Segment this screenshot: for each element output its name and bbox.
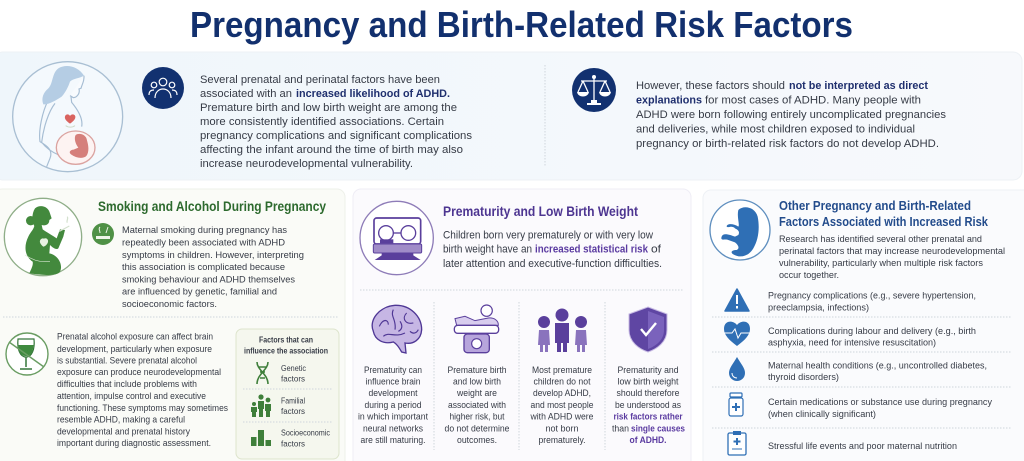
icon: bar chart — [251, 430, 271, 446]
text block: smoking: Maternal smoking during pregnancy has — [122, 225, 287, 236]
text block: smoking: repeatedly been associated with ADHD — [122, 238, 285, 248]
text block: most do not develop ADHD: develop ADHD, — [533, 388, 591, 399]
text block: associations — [200, 74, 473, 170]
text block: prematurity — [443, 230, 662, 270]
icon: people group — [142, 67, 184, 109]
labels: factors: Socioeconomic — [281, 428, 331, 438]
list: risk factors: Complications during labour and delivery (e.g., birth — [768, 326, 976, 337]
text block: risk factors not single causes — [612, 365, 685, 446]
list: risk factors: asphyxia, need for intensive resuscitation) — [768, 338, 936, 348]
labels: factors — [281, 363, 331, 448]
icon: warning triangle — [725, 289, 749, 311]
text block: associated with higher risk: Premature birth — [448, 365, 506, 376]
text block: not direct explanations: pregnancy or birth-related risk factors do not develop ADHD. — [636, 138, 939, 150]
icon: infant scale — [454, 305, 499, 353]
list: risk factors: (when clinically significant) — [768, 409, 876, 420]
text block: smoking: are influenced by genetic, familial and — [122, 286, 277, 298]
text block: most do not develop ADHD: children do not — [534, 376, 591, 388]
text block: not direct explanations: However, these factors should — [636, 80, 785, 92]
text block: brain development: development — [368, 388, 418, 399]
icon: heart pulse — [724, 322, 750, 346]
text block: associations: associated with an — [200, 88, 292, 100]
text block: risk factors not single causes: than — [612, 424, 629, 434]
text block: associated with higher risk: do not determine — [444, 424, 510, 434]
panel: introduction — [0, 52, 1022, 180]
text block: prematurity: increased statistical risk — [535, 244, 649, 256]
list: risk factors — [768, 290, 992, 452]
panel: prematurity and low birth weight — [353, 189, 691, 461]
icon: DNA — [257, 362, 268, 384]
title: Pregnancy and Birth-Related Risk Factors — [190, 4, 853, 45]
text block: most do not develop ADHD: prematurely. — [538, 435, 586, 446]
icon: shield with check — [629, 307, 667, 352]
text block: brain development: in which important — [358, 412, 428, 422]
text block: alcohol: is substantial. Severe prenatal alcohol — [57, 356, 197, 366]
heading: Prematurity and Low Birth Weight — [443, 204, 638, 219]
text block: alcohol: development, particularly when exposure — [57, 344, 212, 355]
text block: risk factors not single causes: should therefore — [616, 388, 680, 399]
text block: most do not develop ADHD — [530, 365, 594, 446]
text block: not direct explanations: explanations — [636, 94, 702, 106]
text block: brain development: influence brain — [366, 376, 420, 388]
panel: factors that can influence the association: influence the association — [244, 346, 328, 356]
text block: associations: Several prenatal and perinatal factors have been — [200, 74, 440, 86]
labels: factors: Genetic — [281, 363, 307, 373]
labels: factors: factors — [281, 438, 305, 448]
text block: associations: pregnancy complications and significant complications — [200, 130, 473, 142]
text block: smoking: symptoms in children. However, interpreting — [122, 250, 304, 261]
labels: factors: factors — [281, 374, 305, 384]
text block: associated with higher risk: outcomes. — [457, 435, 497, 446]
text block: risk factors not single causes: low birth weight — [618, 376, 679, 388]
icon: brain — [372, 305, 422, 353]
text block: smoking: this association is complicated because — [122, 262, 285, 273]
text block: prematurity: of — [651, 244, 662, 256]
text block: prematurity: later attention and executive-function difficulties. — [443, 258, 662, 270]
text block: alcohol: difficulties that include problems with — [57, 379, 197, 390]
text block: alcohol: resemble ADHD, making a careful — [57, 414, 185, 426]
icon: pregnant silhouette smoking — [4, 198, 82, 276]
text block: research — [779, 234, 1005, 281]
icon: pregnant mother in circle — [13, 62, 123, 172]
heading — [779, 198, 989, 229]
list: risk factors: Certain medications or substance use during pregnancy — [768, 397, 992, 408]
heading: Other Pregnancy and Birth-Related — [779, 198, 971, 213]
text block: associations: more consistently identified associations. Certain — [200, 116, 444, 128]
text block: associations: increased likelihood of ADHD. — [296, 88, 450, 100]
text block: most do not develop ADHD: not born — [546, 424, 578, 434]
icon: medicine bottle — [729, 393, 743, 416]
text block: alcohol: functioning. These symptoms may sometimes — [57, 403, 228, 414]
text block: risk factors not single causes: Prematurity and — [618, 365, 678, 376]
text block: smoking: smoking behaviour and ADHD themselves — [122, 274, 295, 286]
list: risk factors: thyroid disorders) — [768, 372, 839, 383]
text block: research: occur together. — [779, 270, 839, 281]
text block: most do not develop ADHD: Most premature — [532, 365, 592, 376]
text block: risk factors not single causes: single causes — [631, 424, 685, 434]
text block: research: Research has identified several other prenatal and — [779, 234, 982, 245]
icon: clipboard — [728, 431, 746, 455]
text block: associated with higher risk — [444, 365, 510, 446]
text block: smoking: socioeconomic factors. — [122, 299, 217, 310]
icon: family — [251, 394, 271, 417]
text block: associations: Premature birth and low birth weight are among the — [200, 102, 457, 114]
text block: brain development — [358, 365, 428, 446]
text block: associations: affecting the infant around the time of birth may also — [200, 144, 463, 156]
list: risk factors: Stressful life events and poor maternal nutrition — [768, 441, 957, 452]
list: risk factors: Pregnancy complications (e.g., severe hypertension, — [768, 290, 976, 302]
text block: smoking — [122, 225, 304, 310]
heading: Smoking and Alcohol During Pregnancy — [98, 199, 326, 214]
text block: alcohol: Prenatal alcohol exposure can affect brain — [57, 332, 213, 342]
text block: alcohol: exposure can produce neurodevelopmental — [57, 367, 221, 378]
text block: prematurity: birth weight have an — [443, 244, 532, 256]
text block: brain development: are still maturing. — [360, 435, 426, 446]
text block: risk factors not single causes: be understood as — [615, 400, 681, 411]
panel: factors that can influence the association — [236, 329, 339, 459]
icon: fetus — [710, 200, 770, 260]
icon: water drop — [729, 357, 745, 381]
text block: alcohol — [57, 332, 228, 449]
text block: alcohol: attention, impulse control and executive — [57, 391, 206, 402]
text block: alcohol: important during diagnostic assessment. — [57, 438, 211, 449]
text block: not direct explanations: and deliveries, while most children exposed to individual — [636, 124, 915, 136]
text block: associated with higher risk: and low birth — [453, 376, 501, 388]
text block: not direct explanations: for most cases of ADHD. Many people with — [705, 94, 921, 106]
icon: cigarette — [92, 223, 114, 245]
text block: associations: increase neurodevelopmental vulnerability. — [200, 158, 413, 170]
labels: factors: factors — [281, 406, 305, 416]
text block: risk factors not single causes: of ADHD. — [630, 435, 666, 446]
text block: associated with higher risk: higher risk, but — [450, 412, 505, 422]
panel: factors that can influence the association: Factors that can — [259, 334, 313, 344]
icon: scales of justice — [572, 68, 616, 112]
text block: associated with higher risk: associated with — [448, 400, 506, 411]
labels: factors: Familial — [281, 395, 305, 405]
text block: brain development: neural networks — [363, 424, 423, 434]
text block: brain development: during a period — [364, 400, 422, 411]
text block: not direct explanations: not be interpreted as direct — [789, 80, 928, 92]
text block: not direct explanations — [636, 80, 946, 150]
text block: research: vulnerability, particularly when multiple risk factors — [779, 258, 983, 269]
text block: not direct explanations: ADHD were born following entirely uncomplicated pregnancies — [636, 109, 946, 121]
text block: brain development: Prematurity can — [364, 365, 422, 376]
text block: alcohol: developmental and prenatal history — [57, 426, 190, 438]
icon: incubator — [360, 201, 433, 275]
list: risk factors: preeclampsia, infections) — [768, 302, 869, 314]
text block: prematurity: Children born very prematurely or with very low — [443, 230, 653, 242]
text block: research: perinatal factors that may increase neurodevelopmental — [779, 246, 1005, 257]
icon: no alcohol — [6, 333, 48, 375]
heading: Factors Associated with Increased Risk — [779, 214, 989, 229]
panel: smoking and alcohol — [0, 189, 345, 461]
icon: three people — [538, 308, 587, 352]
list: risk factors: Maternal health conditions (e.g., uncontrolled diabetes, — [768, 360, 987, 372]
text block: risk factors not single causes: risk factors rather — [614, 412, 683, 422]
text block: most do not develop ADHD: and most people — [530, 400, 594, 411]
panel: other pregnancy and birth-related factors — [703, 190, 1024, 461]
text block: associated with higher risk: weight are — [456, 388, 497, 399]
text block: most do not develop ADHD: with ADHD were — [530, 412, 594, 422]
